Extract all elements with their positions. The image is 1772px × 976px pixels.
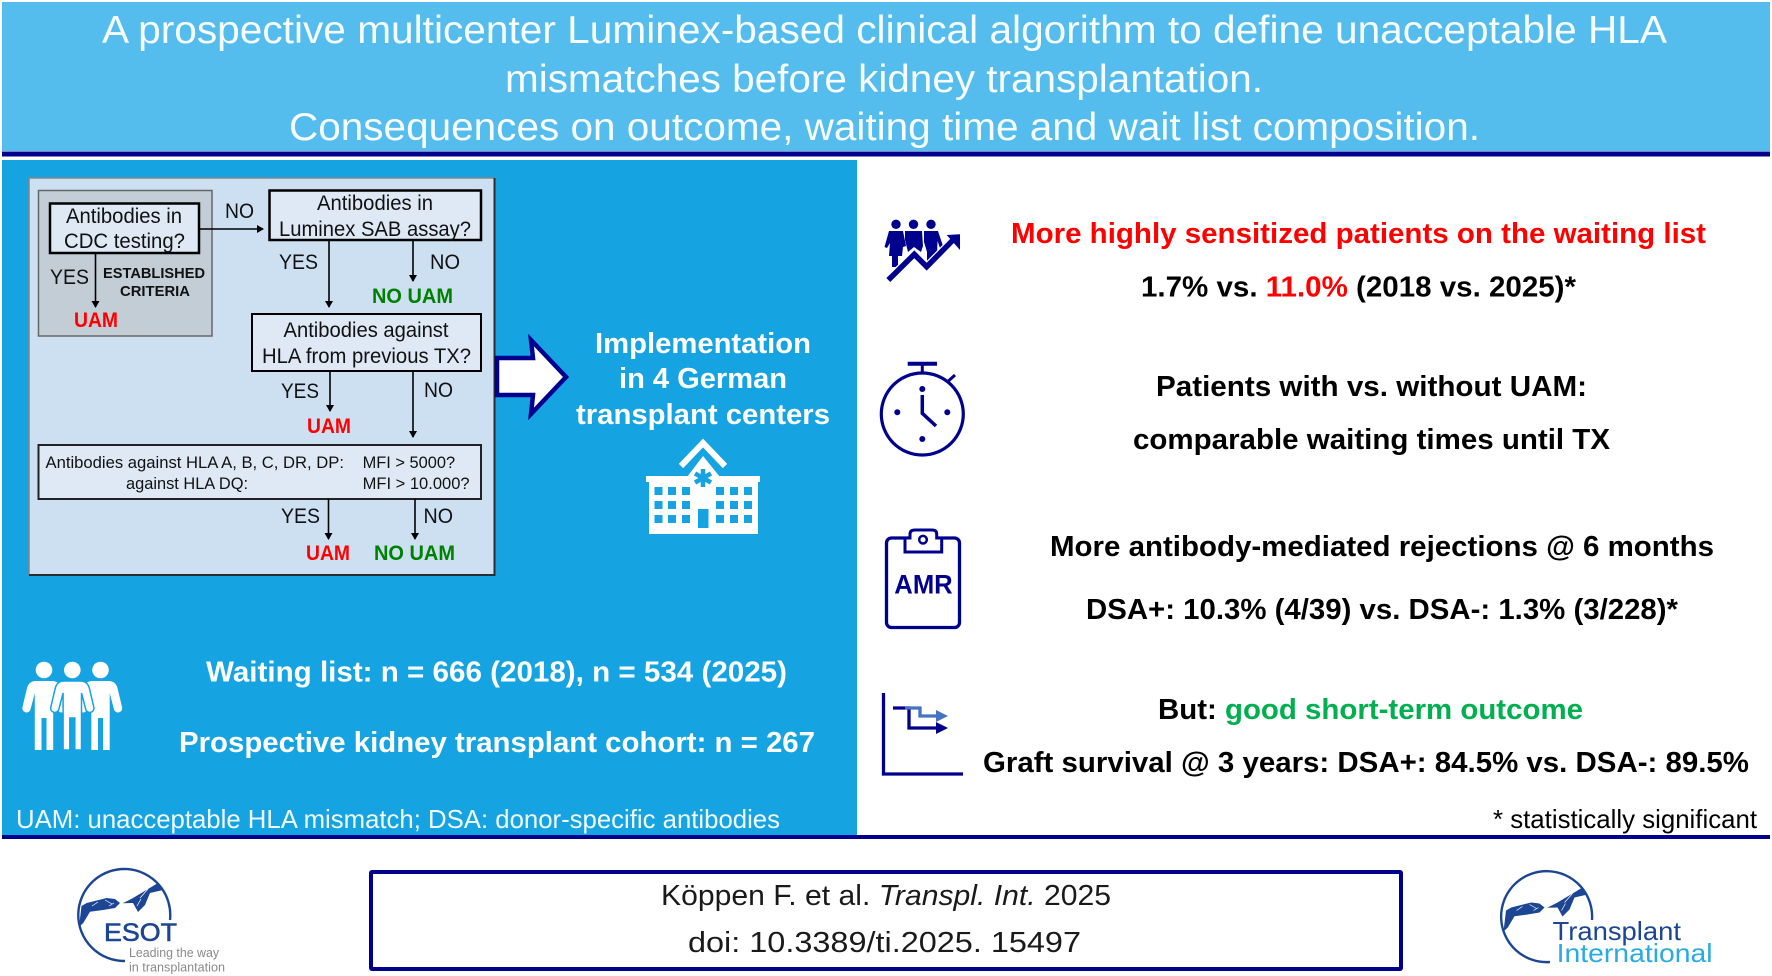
finding: waiting times: comparable waiting times until TX	[1133, 424, 1611, 456]
bottom divider	[2, 835, 1770, 839]
finding: sensitized patients: 1.7% vs. 11.0% (2018 vs. 2025)*	[1141, 272, 1577, 304]
header banner	[2, 2, 1770, 156]
branch: previous TX yes to UAM	[281, 371, 351, 438]
finding: short-term outcome: But: good short-term outcome	[1158, 694, 1583, 726]
icon: people with rising arrow	[884, 220, 960, 280]
logo: ESOT: in transplantation	[129, 960, 225, 974]
citation box: doi: 10.3389/ti.2025. 15497	[688, 927, 1081, 959]
finding: short-term outcome: Graft survival @ 3 years: DSA+: 84.5% vs. DSA-: 89.5%	[983, 747, 1749, 779]
arrow: CDC no	[199, 228, 263, 230]
branch: Luminex no to no UAM	[372, 240, 460, 308]
branch: MFI yes to UAM: UAM	[306, 542, 350, 565]
icon: AMR clipboard: AMR	[894, 569, 953, 599]
decision: MFI thresholds: Antibodies against HLA A, B, C, DR, DP:	[46, 453, 344, 472]
decision: Luminex SAB	[270, 190, 481, 241]
text: abbreviations: UAM: unacceptable HLA mismatch; DSA: donor-specific antibodies	[16, 804, 780, 834]
decision: MFI thresholds: MFI > 5000?	[363, 453, 455, 472]
branch: MFI yes to UAM: YES	[281, 505, 320, 528]
panel: left methods	[2, 160, 857, 836]
branch: Luminex yes	[279, 240, 329, 307]
title: mismatches before kidney transplantation.	[505, 58, 1263, 101]
finding: short-term outcome	[884, 693, 1749, 779]
icon: patient group	[22, 662, 122, 750]
citation box: Köppen F. et al. Transpl. Int. 2025	[661, 880, 1111, 912]
branch: MFI no to no UAM: NO UAM	[374, 542, 455, 565]
branch: Luminex no to no UAM: NO	[430, 251, 460, 274]
decision: previous transplant: Antibodies against	[284, 319, 449, 342]
finding: antibody-mediated rejection: More antibody-mediated rejections @ 6 months	[1050, 531, 1714, 563]
decision: CDC testing	[50, 204, 199, 253]
logo: Transplant International: International	[1557, 938, 1713, 968]
finding: antibody-mediated rejection	[886, 530, 1714, 628]
decision: CDC testing: Antibodies in	[66, 205, 182, 228]
decision: Luminex SAB: Luminex SAB assay?	[279, 218, 471, 241]
text: implementation in 4 German centers: transplant centers	[576, 399, 830, 431]
established criteria box	[38, 190, 212, 336]
decision: MFI thresholds: against HLA DQ:	[126, 474, 248, 493]
logo: Transplant International	[1501, 871, 1713, 968]
established criteria box: ESTABLISHED	[103, 265, 205, 282]
icon: stopwatch	[881, 364, 963, 455]
decision: MFI thresholds	[38, 445, 481, 499]
branch: CDC yes to UAM: UAM	[74, 309, 118, 332]
finding: sensitized patients: More highly sensitized patients on the waiting list	[1011, 218, 1706, 250]
branch: MFI yes to UAM	[281, 499, 350, 565]
text: waiting list size: Waiting list: n = 666 (2018), n = 534 (2025)	[206, 656, 787, 688]
logo: ESOT	[78, 869, 225, 974]
finding: sensitized patients	[884, 218, 1706, 304]
branch: previous TX yes to UAM: UAM	[307, 415, 351, 438]
decision: previous transplant: HLA from previous TX?	[262, 345, 471, 368]
branch: Luminex no to no UAM: NO UAM	[372, 285, 453, 308]
panel: right findings	[881, 218, 1758, 834]
branch: previous TX no	[413, 371, 453, 437]
label: no: NO	[225, 200, 254, 223]
icon: hospital	[646, 443, 760, 534]
branch: MFI no to no UAM	[374, 499, 455, 565]
title: A prospective multicenter Luminex-based clinical algorithm to define unacceptable HLA	[102, 9, 1667, 52]
text: implementation in 4 German centers: in 4 German	[619, 363, 787, 395]
title: Consequences on outcome, waiting time and wait list composition.	[289, 106, 1480, 149]
text: implementation in 4 German centers: Implementation	[595, 328, 811, 360]
text: transplant cohort size: Prospective kidney transplant cohort: n = 267	[179, 727, 815, 759]
title	[102, 9, 1667, 149]
decision: MFI thresholds: MFI > 10.000?	[363, 474, 470, 493]
branch: CDC yes to UAM	[50, 253, 118, 332]
finding: antibody-mediated rejection: DSA+: 10.3% (4/39) vs. DSA-: 1.3% (3/228)*	[1086, 594, 1679, 626]
branch: CDC yes to UAM: YES	[50, 266, 89, 289]
arrow: to implementation	[497, 340, 566, 414]
established criteria box: CRITERIA	[120, 283, 190, 300]
flowchart: UAM algorithm	[29, 178, 494, 575]
branch: Luminex yes: YES	[279, 251, 318, 274]
branch: previous TX no: NO	[424, 379, 453, 402]
icon: AMR clipboard	[886, 530, 960, 628]
decision: Luminex SAB: Antibodies in	[317, 192, 433, 215]
decision: CDC testing: CDC testing?	[64, 230, 185, 253]
branch: previous TX yes to UAM: YES	[281, 380, 319, 403]
logo: Transplant International: Transplant	[1552, 916, 1682, 946]
finding: waiting times	[881, 364, 1611, 456]
finding: waiting times: Patients with vs. without UAM:	[1156, 371, 1587, 403]
footnote: * statistically significant	[1493, 804, 1758, 834]
citation box	[371, 872, 1401, 969]
decision: previous transplant	[252, 314, 481, 371]
branch: MFI no to no UAM: NO	[424, 505, 453, 528]
logo: ESOT: ESOT	[104, 919, 177, 947]
icon: survival curve	[884, 693, 963, 774]
text: implementation in 4 German centers	[576, 328, 830, 431]
logo: ESOT: Leading the way	[129, 946, 220, 960]
